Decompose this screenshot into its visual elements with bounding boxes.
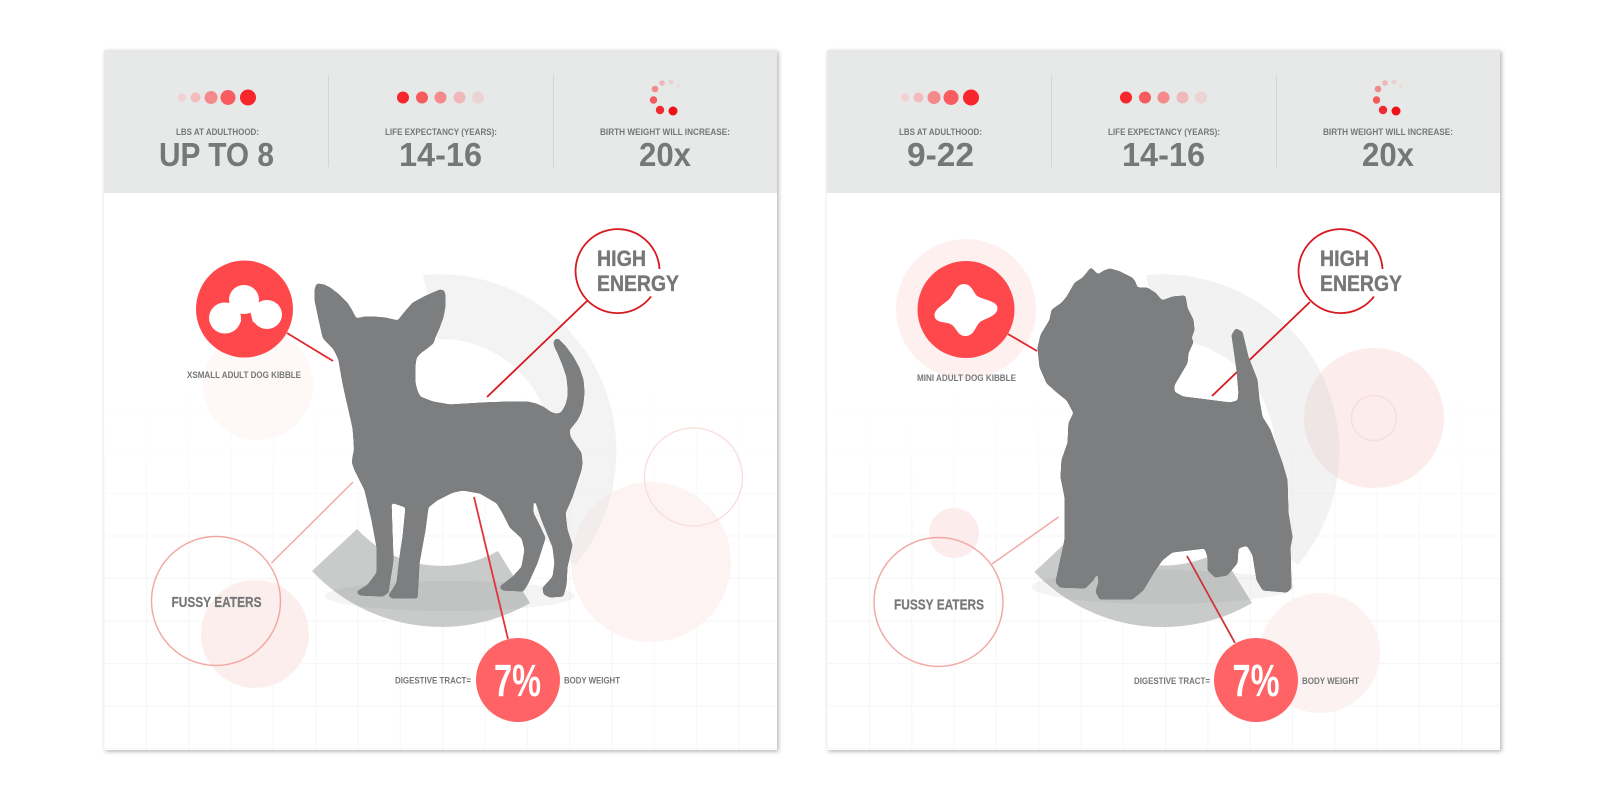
callout: digestive tract 7 percent: DIGESTIVE TRACT= [395, 676, 471, 686]
icon: weight dots [178, 90, 256, 106]
icon: birth weight spiral dots [650, 80, 680, 116]
label: mini kibble: MINI ADULT DOG KIBBLE [917, 373, 1016, 383]
decorative pale circles [896, 239, 1444, 713]
callout: digestive tract 7 percent: 7% [1232, 655, 1280, 706]
stat label: lbs at adulthood: LBS AT ADULTHOOD: [176, 127, 259, 137]
pale growth ring [1146, 274, 1339, 565]
callout: high energy [576, 229, 679, 313]
callout: high energy: ENERGY [1320, 271, 1402, 296]
ground shadow [1032, 570, 1294, 604]
label: xsmall kibble: XSMALL ADULT DOG KIBBLE [187, 370, 301, 380]
line: digestive tract callout [474, 497, 508, 639]
small outline circle [1352, 396, 1396, 440]
callout: fussy eaters: FUSSY EATERS [894, 598, 984, 614]
icon: life expectancy dots [1120, 92, 1207, 104]
header band: mini dog stats [827, 50, 1500, 193]
callout: fussy eaters [152, 536, 280, 666]
icon: birth weight spiral dots [1373, 80, 1403, 116]
line: kibble callout [1008, 334, 1037, 351]
line: fussy eaters callout [992, 517, 1059, 564]
dog silhouette: chihuahua [315, 284, 584, 598]
ground shadow [325, 581, 575, 611]
callout: high energy: HIGH [1320, 246, 1369, 271]
callout: digestive tract 7 percent: 7% [494, 655, 541, 706]
stat label: life expectancy: LIFE EXPECTANCY (YEARS): [1108, 127, 1220, 137]
stat label: lbs at adulthood: LBS AT ADULTHOOD: [899, 127, 982, 137]
decorative pale circles [201, 330, 742, 688]
stat value: 20x: 20x [1362, 137, 1414, 174]
callout: fussy eaters: FUSSY EATERS [172, 595, 262, 611]
grey arc segment [1034, 529, 1252, 627]
callout: high energy [1299, 229, 1402, 313]
stat value: 20x: 20x [639, 137, 691, 174]
icon: life expectancy dots [397, 92, 484, 104]
callout: digestive tract 7 percent: DIGESTIVE TRACT= [1134, 676, 1210, 687]
callout: digestive tract 7 percent [1134, 638, 1359, 722]
line: high energy callout [487, 301, 587, 397]
kibble badge: xsmall [196, 260, 293, 358]
dog silhouette: west highland terrier [1038, 268, 1292, 599]
line: digestive tract callout [1187, 556, 1235, 643]
stat label: birth weight: BIRTH WEIGHT WILL INCREASE: [600, 127, 730, 137]
line: kibble callout [287, 333, 333, 361]
callout: fussy eaters [874, 538, 1003, 666]
panel: extra small dog [104, 50, 777, 750]
callout: digestive tract 7 percent: BODY WEIGHT [564, 676, 620, 686]
callout: digestive tract 7 percent: BODY WEIGHT [1302, 676, 1359, 687]
kibble badge: mini [918, 261, 1014, 358]
header band: extra small dog stats [104, 50, 777, 193]
callout: high energy: ENERGY [597, 271, 679, 296]
stat value: 9-22: 9-22 [907, 137, 974, 174]
pale growth ring [423, 274, 616, 565]
line: high energy callout [1212, 302, 1310, 396]
icon: mini kibble shape [934, 284, 998, 336]
callout: digestive tract 7 percent [395, 638, 620, 722]
stat value: 14-16: 14-16 [399, 137, 482, 174]
panel: mini dog [827, 50, 1500, 750]
stat value: up to 8: UP TO 8 [159, 137, 274, 174]
stat label: birth weight: BIRTH WEIGHT WILL INCREASE: [1323, 127, 1453, 137]
stat label: life expectancy: LIFE EXPECTANCY (YEARS): [385, 127, 497, 137]
callout: high energy: HIGH [597, 246, 646, 271]
line: fussy eaters callout [272, 482, 353, 563]
icon: weight dots [901, 90, 979, 106]
stat value: 14-16: 14-16 [1122, 137, 1205, 174]
grey arc segment [312, 529, 530, 627]
icon: xsmall kibble shape [209, 285, 282, 334]
